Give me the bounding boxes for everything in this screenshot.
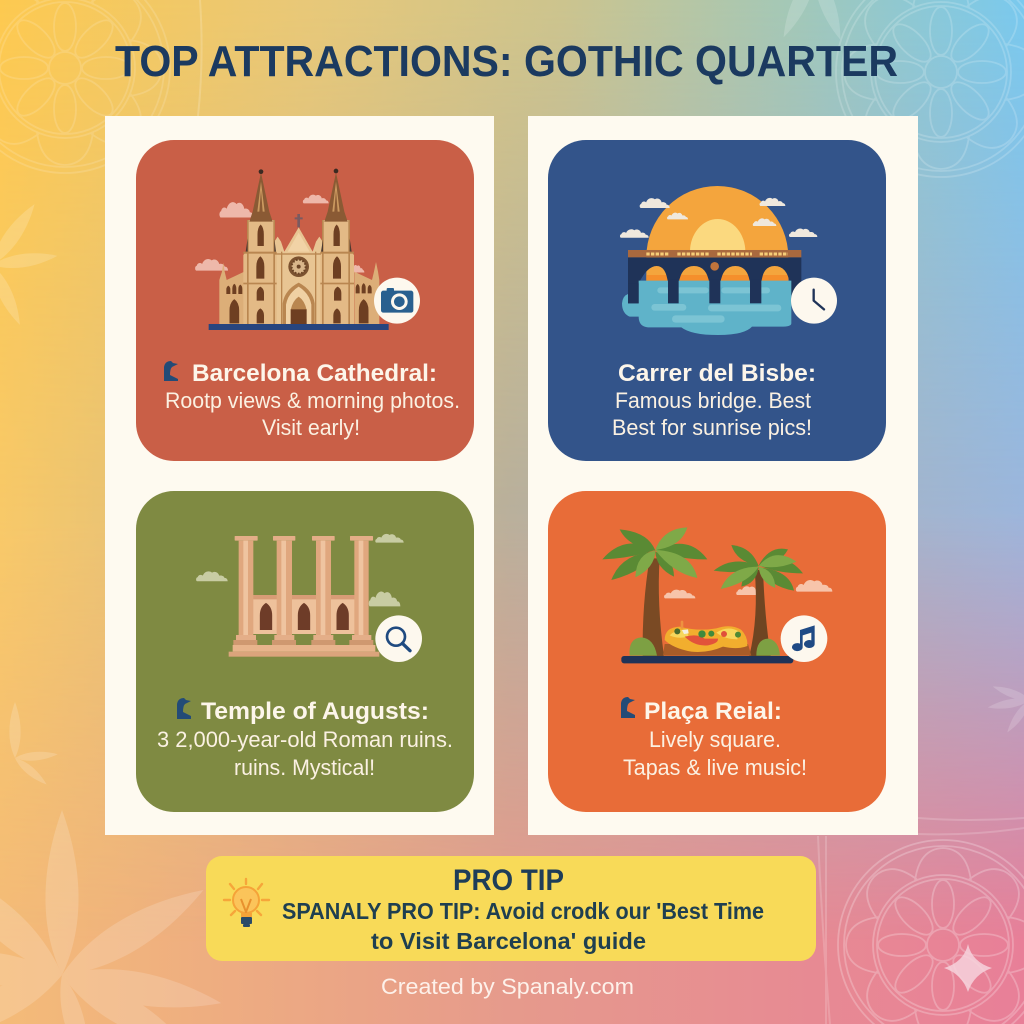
panel: left column [105, 116, 494, 835]
callout: pro tip [206, 856, 816, 961]
icon: magnifier badge [375, 615, 422, 662]
footer credit: Created by Spanaly.com [381, 974, 634, 999]
illustration: palm trees and tapas [602, 527, 832, 663]
description: Visit early! [262, 415, 360, 440]
description: ruins. Mystical! [234, 755, 375, 780]
description: 3 2,000-year-old Roman ruins. [157, 727, 453, 752]
heading: Carrer del Bisbe: [618, 360, 816, 387]
icon: camera badge [374, 278, 420, 324]
icon: music note badge [781, 615, 827, 662]
title: TOP ATTRACTIONS: GOTHIC QUARTER [115, 37, 898, 86]
icon: light bulb [224, 879, 269, 927]
heading: PRO TIP [453, 864, 564, 897]
icon: pin mark [164, 361, 178, 381]
card: Temple of Augustus [136, 491, 474, 812]
description: Lively square. [649, 727, 781, 752]
illustration: bridge at sunrise [620, 186, 837, 335]
tip text: SPANALY PRO TIP: Avoid crodk our 'Best Time [282, 898, 764, 924]
illustration: cathedral [195, 169, 420, 330]
description: Rootp views & morning photos. [165, 388, 460, 413]
description: Famous bridge. Best [615, 388, 811, 413]
card: Placa Reial [548, 491, 886, 812]
icon: pin mark [621, 697, 635, 718]
icon: clock badge [791, 278, 837, 324]
description [157, 727, 453, 780]
description [623, 727, 807, 780]
illustration: roman temple [196, 534, 422, 662]
description: Best for sunrise pics! [612, 415, 812, 440]
icon: pin mark [177, 698, 191, 719]
heading: Temple of Augusts: [201, 698, 429, 725]
description [165, 388, 460, 440]
icon: sparkle [944, 944, 992, 992]
description: Tapas & live music! [623, 755, 807, 780]
description [612, 388, 812, 440]
card: Carrer del Bisbe [548, 140, 886, 461]
tip text [282, 898, 764, 954]
heading: Barcelona Cathedral: [192, 360, 437, 387]
heading: Plaça Reial: [644, 698, 782, 725]
tip text: to Visit Barcelona' guide [371, 928, 646, 954]
panel: right column [528, 116, 918, 835]
card: Barcelona Cathedral [136, 140, 474, 461]
